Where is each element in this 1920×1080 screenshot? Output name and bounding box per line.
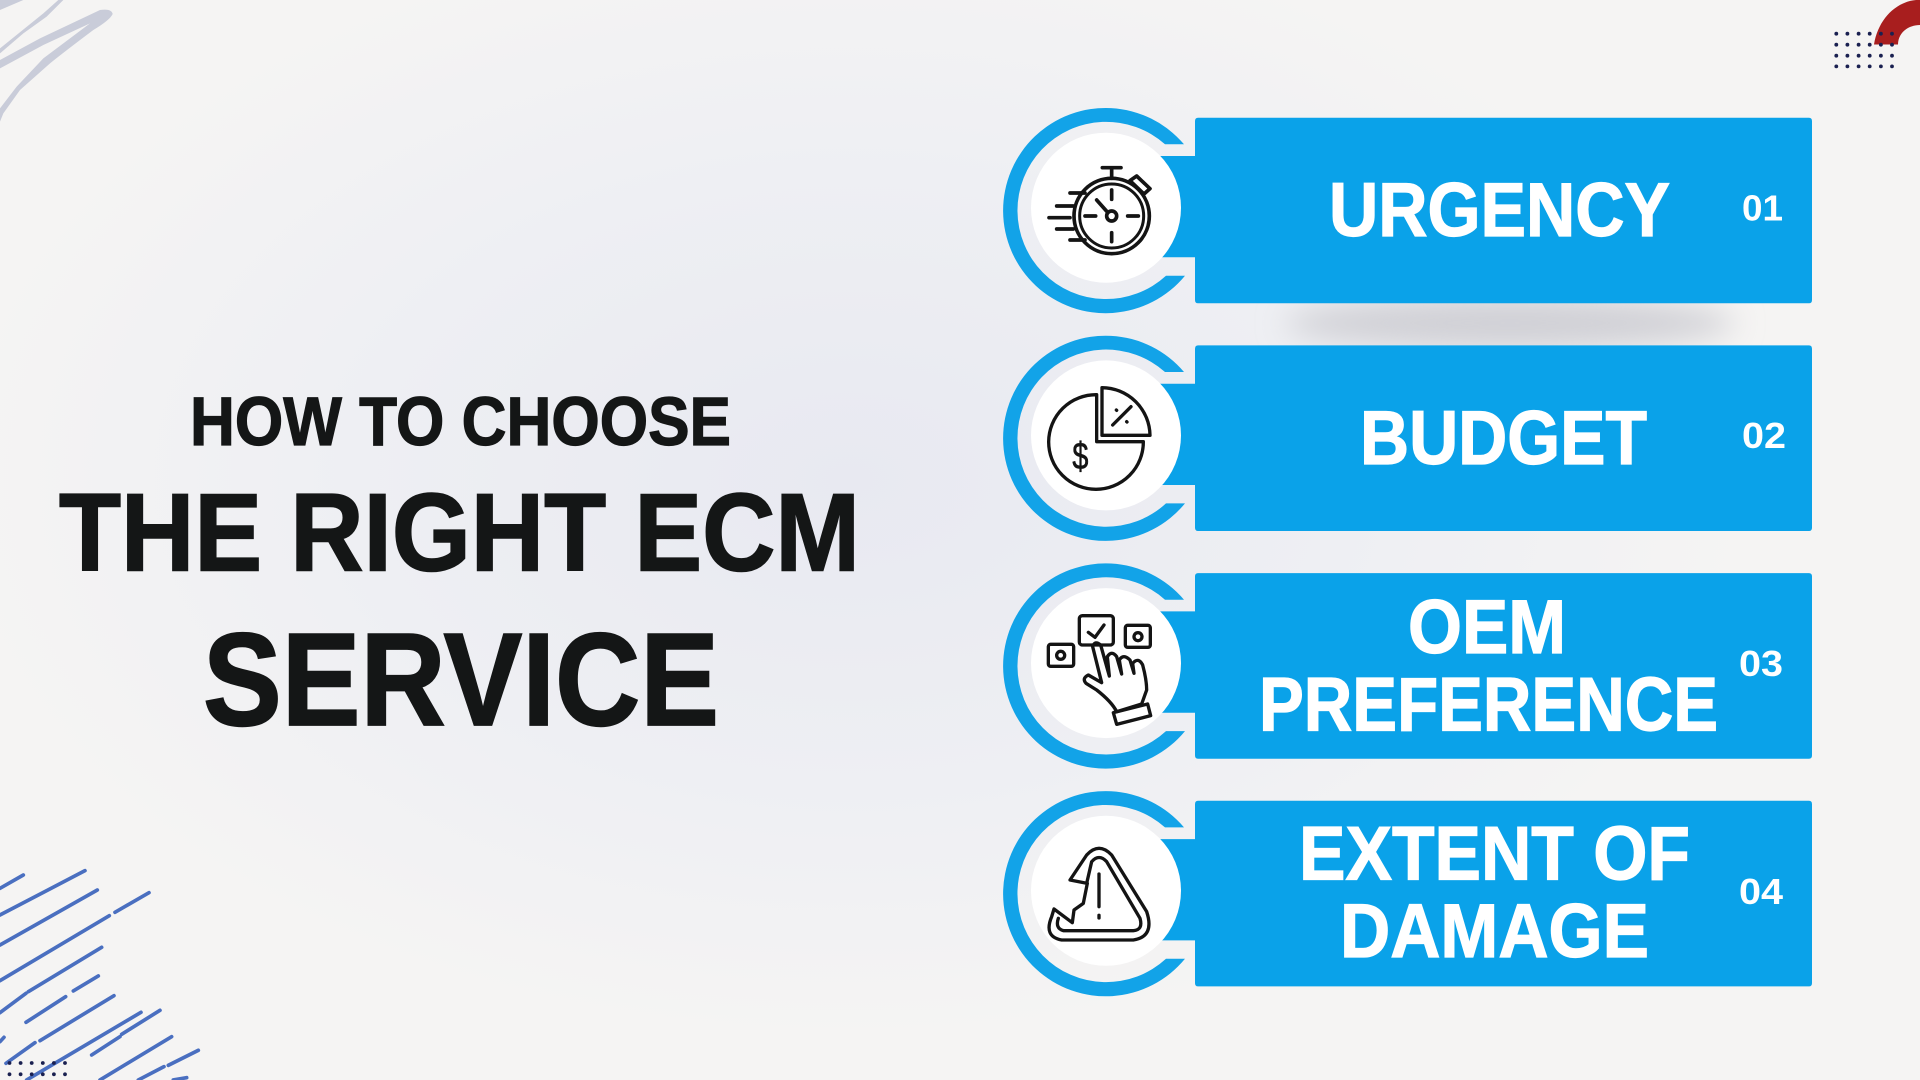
number: 04: [1739, 871, 1783, 912]
number: 02: [1742, 415, 1786, 456]
ring: [1003, 791, 1185, 996]
white disc: [1031, 588, 1181, 738]
title line: how to choose: HOW TO CHOOSE: [190, 383, 731, 460]
connector and bar: [1160, 345, 1812, 531]
label: OEM: [1408, 585, 1566, 670]
panel: urgency row: [1003, 108, 1812, 313]
title line: service: SERVICE: [203, 606, 719, 753]
ring: [1003, 108, 1185, 313]
label: [1259, 585, 1718, 748]
decoration: dot grid bottom left: [8, 1061, 67, 1076]
label: [1299, 812, 1690, 974]
ring: [1003, 336, 1185, 541]
label: DAMAGE: [1340, 889, 1649, 974]
decoration: grey scribble top left: [0, 0, 113, 122]
icon: stopwatch: [1049, 168, 1150, 254]
connector and bar: [1160, 118, 1812, 303]
connector and bar: [1160, 573, 1812, 759]
panel: extent of damage row: [1003, 791, 1812, 996]
label: PREFERENCE: [1259, 662, 1718, 748]
white disc: [1031, 816, 1181, 966]
label: BUDGET: [1360, 396, 1647, 481]
title line: the right ecm: THE RIGHT ECM: [59, 471, 860, 594]
panel: oem preference row: [1003, 563, 1812, 769]
ring: [1003, 563, 1185, 769]
title: [59, 383, 860, 753]
icon: hand selecting checkbox: [1048, 616, 1151, 724]
label: EXTENT OF: [1299, 812, 1690, 896]
icon: broken warning triangle: [1049, 848, 1149, 940]
icon: pie chart with dollar and percent: $: [1072, 435, 1088, 478]
decoration: dot grid top right: [1834, 32, 1894, 68]
white disc: [1031, 360, 1181, 510]
white disc: [1031, 133, 1181, 283]
number: 01: [1742, 188, 1783, 228]
decoration: blue brush strokes bottom left: [0, 871, 198, 1080]
panel: budget row: [1003, 336, 1812, 541]
number: 03: [1739, 643, 1783, 684]
label: URGENCY: [1329, 168, 1670, 253]
connector and bar: [1160, 801, 1812, 986]
icon: pie chart with dollar and percent: [1049, 388, 1150, 489]
decoration: red arc top right: [1874, 0, 1920, 44]
